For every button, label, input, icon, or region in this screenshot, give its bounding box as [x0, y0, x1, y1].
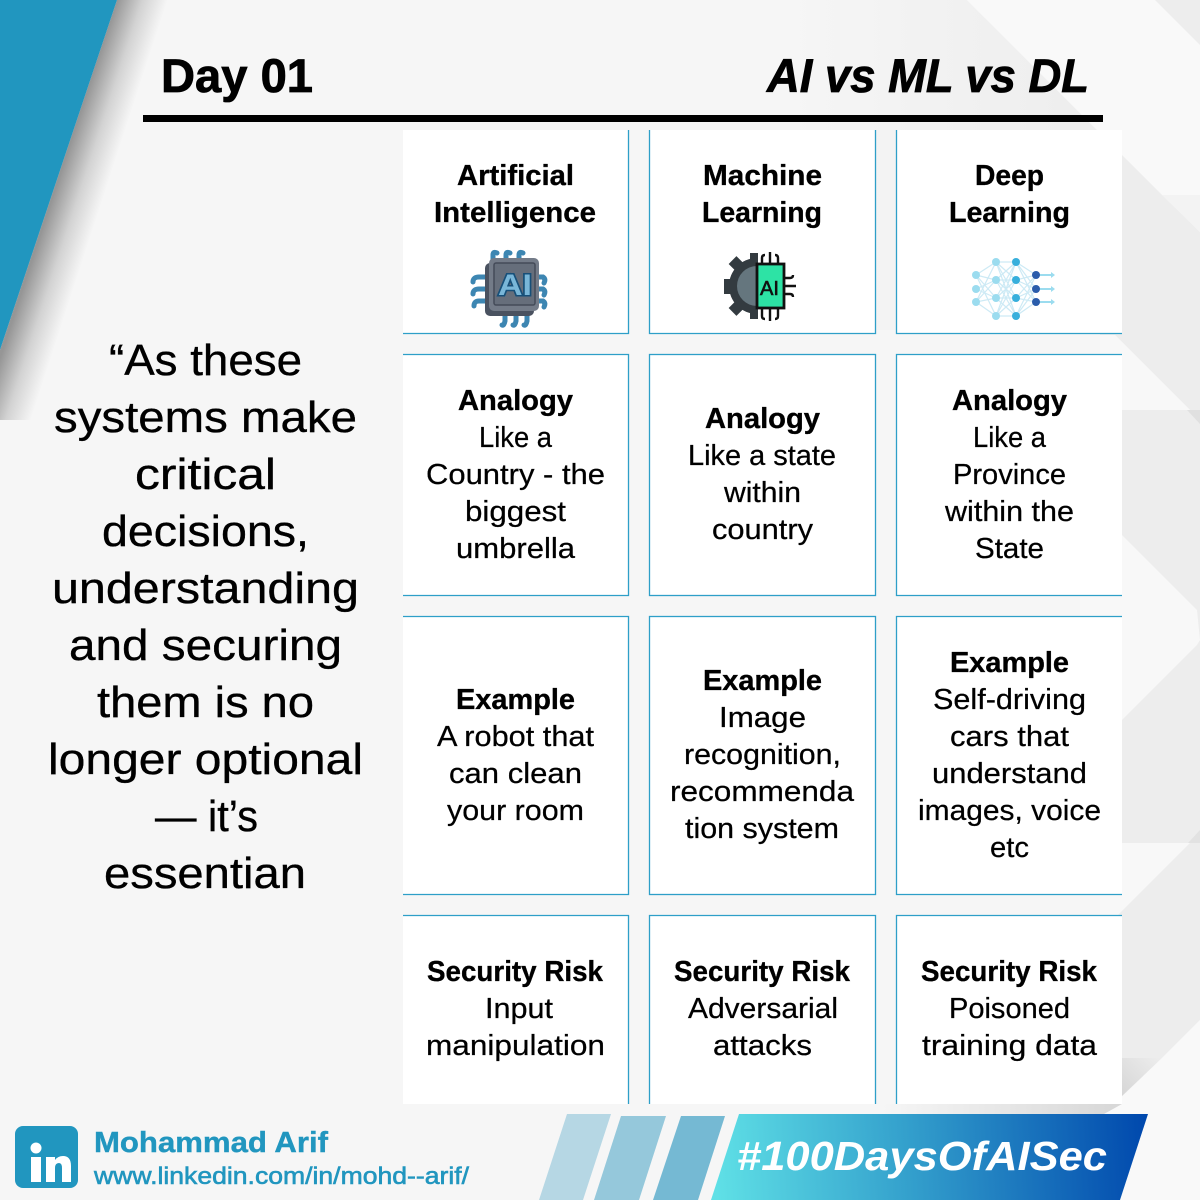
panel: AI analogy: umbrella	[456, 533, 576, 565]
quote text block: — it’s	[155, 792, 258, 841]
panel: AI example: can clean	[449, 758, 582, 790]
panel: ML example: Example	[703, 665, 822, 697]
panel: DL analogy: Like a	[973, 422, 1047, 454]
author name: Mohammad Arif	[94, 1127, 328, 1159]
profile url: www.linkedin.com/in/mohd--arif/	[93, 1163, 469, 1190]
panel: ML example: tion system	[685, 813, 839, 845]
panel: DL example: Self-driving	[933, 684, 1086, 716]
panel: ML analogy: Analogy	[705, 403, 820, 435]
panel: DL security risk	[896, 915, 1122, 1104]
panel: AI security risk: Security Risk	[427, 956, 604, 988]
quote text block: systems make	[54, 393, 357, 442]
panel: artificial intelligence header: Artificial	[457, 160, 574, 192]
icon: AI chip	[473, 252, 545, 325]
quote text block: them is no	[97, 678, 314, 727]
decorative bar 3	[653, 1116, 725, 1200]
panel: AI security risk: manipulation	[426, 1030, 605, 1062]
corner shadow	[0, 0, 172, 420]
hashtag banner	[711, 1114, 1148, 1200]
quote text block: and securing	[69, 621, 342, 670]
icon: linkedin	[15, 1126, 78, 1188]
quote text block: longer optional	[48, 735, 363, 784]
panel: ML security risk	[650, 915, 876, 1104]
panel: AI example	[403, 616, 629, 895]
panel: deep learning header: Learning	[949, 197, 1070, 229]
title: topic: AI vs ML vs DL	[766, 49, 1089, 102]
panel: ML analogy: Like a state	[688, 440, 836, 472]
panel: AI analogy: Country - the	[426, 459, 605, 491]
panel: DL analogy	[896, 354, 1122, 596]
panel: ML analogy: country	[712, 514, 814, 546]
panel: ML security risk: attacks	[713, 1030, 812, 1062]
decorative bar 1	[539, 1114, 611, 1200]
quote text block: critical	[135, 450, 276, 499]
panel: DL analogy: Province	[953, 459, 1066, 491]
panel: ML analogy: within	[723, 477, 801, 509]
panel: AI security risk	[403, 915, 629, 1104]
quote text block: decisions,	[102, 507, 309, 556]
panel: DL example: Example	[950, 647, 1069, 679]
panel: ML analogy	[650, 354, 876, 596]
panel: ML example: recommenda	[670, 776, 855, 808]
panel: AI analogy: biggest	[465, 496, 566, 528]
panel: AI example: Example	[456, 684, 575, 716]
panel: DL example	[896, 616, 1122, 895]
panel: DL example: understand	[932, 758, 1087, 790]
panel: AI analogy	[403, 354, 629, 596]
icon: gear and circuit: AI	[760, 278, 779, 300]
quote text block: “As these	[109, 336, 302, 385]
panel: deep learning header	[896, 130, 1122, 334]
panel: AI analogy: Like a	[479, 422, 553, 454]
panel: DL example: images, voice	[918, 795, 1101, 827]
quote text block	[48, 336, 363, 898]
panel: artificial intelligence header	[403, 130, 629, 334]
panel: machine learning header	[650, 130, 876, 334]
panel: DL security risk: training data	[922, 1030, 1098, 1062]
panel: ML example: Image	[719, 702, 806, 734]
panel: DL analogy: State	[975, 533, 1044, 565]
icon: neural network	[972, 258, 1055, 320]
panel: machine learning header: Learning	[702, 197, 822, 229]
panel: DL analogy: within the	[944, 496, 1074, 528]
title: day: Day 01	[161, 49, 313, 102]
panel: ML example: recognition,	[684, 739, 841, 771]
panel: AI example: your room	[447, 795, 584, 827]
quote text block: understanding	[52, 564, 359, 613]
icon: AI chip: AI	[498, 269, 532, 302]
panel: artificial intelligence header: Intelligence	[434, 197, 596, 229]
panel: AI security risk: Input	[485, 993, 553, 1025]
heading rule	[143, 115, 1103, 122]
panel: DL security risk: Poisoned	[949, 993, 1070, 1025]
blue corner triangle	[0, 0, 117, 350]
panel: ML security risk: Adversarial	[688, 993, 838, 1025]
panel: machine learning header: Machine	[703, 160, 822, 192]
quote text block: essentian	[104, 849, 306, 898]
decorative bar 2	[594, 1116, 666, 1200]
panel: ML security risk: Security Risk	[674, 956, 851, 988]
panel: AI analogy: Analogy	[458, 385, 573, 417]
panel: DL analogy: Analogy	[952, 385, 1067, 417]
panel: ML example	[650, 616, 876, 895]
panel: DL security risk: Security Risk	[921, 956, 1098, 988]
panel: DL example: cars that	[950, 721, 1069, 753]
hashtag banner: #100DaysOfAISec	[737, 1133, 1107, 1179]
panel: DL example: etc	[990, 832, 1029, 864]
icon: gear and circuit	[724, 252, 796, 321]
panel: AI example: A robot that	[437, 721, 594, 753]
panel: deep learning header: Deep	[975, 160, 1044, 192]
